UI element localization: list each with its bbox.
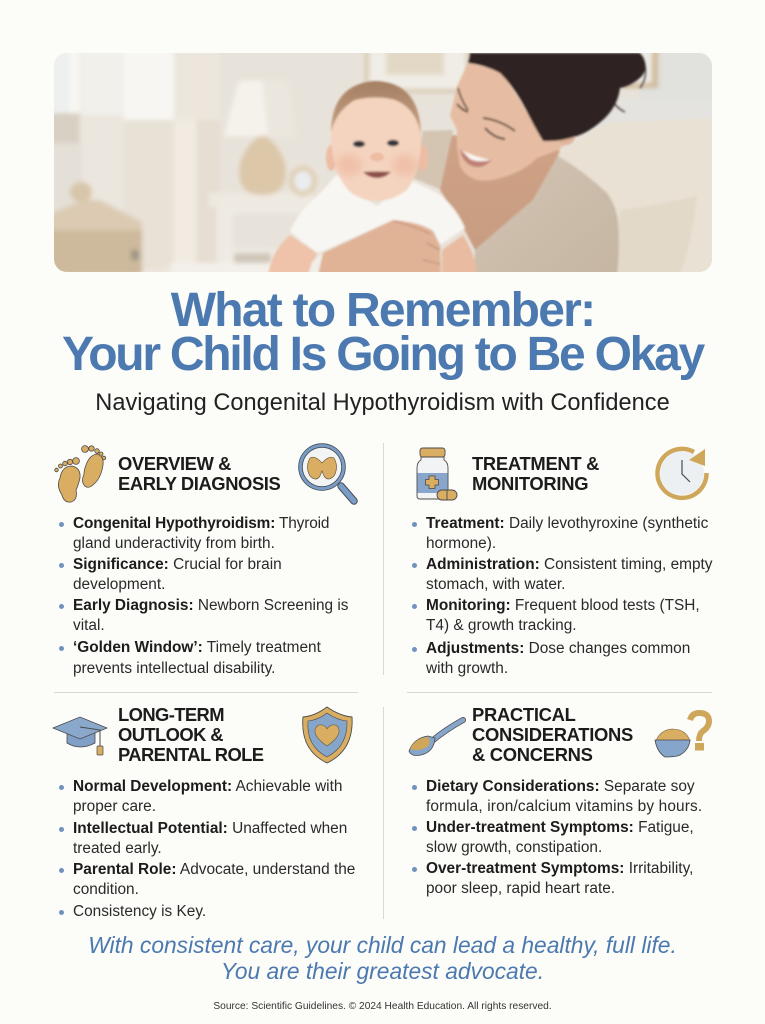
bullet xyxy=(412,515,708,552)
icon: clock with refresh arrow xyxy=(655,446,709,500)
panel: treatment and monitoring xyxy=(412,446,713,677)
mother's features xyxy=(458,88,468,110)
title: Your Child Is Going to Be Okay xyxy=(62,328,703,381)
closing message: With consistent care, your child can lead a healthy, full life. xyxy=(88,932,677,958)
bullet xyxy=(59,556,282,593)
heading: CONSIDERATIONS xyxy=(472,724,633,745)
heading: LONG-TERM xyxy=(118,704,224,725)
bullet xyxy=(412,819,694,856)
bullet: vital. xyxy=(73,617,105,634)
basket xyxy=(50,200,142,232)
mother's hand xyxy=(313,220,441,275)
heading: PRACTICAL xyxy=(472,704,576,725)
bullet: formula, iron/calcium vitamins by hours. xyxy=(426,798,702,815)
bullet: Under-treatment Symptoms: Fatigue, xyxy=(426,819,694,836)
sweater xyxy=(474,156,619,275)
hero photo: mother holding smiling baby xyxy=(54,53,712,272)
bullet: Congenital Hypothyroidism: Thyroid xyxy=(73,515,329,532)
nightstand xyxy=(216,208,300,260)
baby arms xyxy=(268,235,317,275)
heading: EARLY DIAGNOSIS xyxy=(118,473,280,494)
panel: overview and early diagnosis xyxy=(54,443,358,676)
heading xyxy=(118,453,280,494)
heading: OUTLOOK & xyxy=(118,724,223,745)
baby head xyxy=(326,145,336,171)
icon: magnifier over thyroid xyxy=(298,443,358,505)
ear xyxy=(560,137,576,146)
icon: graduation cap xyxy=(52,716,108,756)
bullet xyxy=(412,640,690,677)
title xyxy=(62,284,705,381)
bullet: proper care. xyxy=(73,798,156,815)
bullet xyxy=(412,778,702,815)
clock xyxy=(289,166,317,196)
bullet: Treatment: Daily levothyroxine (synthetic xyxy=(426,515,708,532)
closing message xyxy=(88,932,677,984)
subtitle: Navigating Congenital Hypothyroidism with Confidence xyxy=(95,390,670,416)
bullet xyxy=(412,860,693,897)
bullet: Adjustments: Dose changes common xyxy=(426,640,690,657)
icon: shield with heart xyxy=(302,706,353,764)
icon: spoon of formula xyxy=(408,717,466,756)
bullet: condition. xyxy=(73,881,139,898)
wall xyxy=(220,45,490,245)
panel: long-term outlook and parental role xyxy=(52,704,355,920)
pillow xyxy=(618,198,696,272)
chest skin xyxy=(440,135,560,250)
bullet: Over-treatment Symptoms: Irritability, xyxy=(426,860,693,877)
bullet xyxy=(59,639,321,676)
icon: medicine bottle and pill xyxy=(416,448,458,500)
icon: bowl with question mark xyxy=(654,710,712,758)
bullet: Monitoring: Frequent blood tests (TSH, xyxy=(426,597,700,614)
hair xyxy=(468,53,646,141)
bullet: Consistency is Key. xyxy=(73,903,206,920)
bullet xyxy=(59,597,348,634)
bullet: stomach, with water. xyxy=(426,576,565,593)
bullet: Administration: Consistent timing, empty xyxy=(426,556,713,573)
bullet: gland underactivity from birth. xyxy=(73,535,275,552)
onesie xyxy=(290,174,465,253)
heading: PARENTAL ROLE xyxy=(118,744,263,765)
bullet: Dietary Considerations: Separate soy xyxy=(426,778,695,795)
bullet: Significance: Crucial for brain xyxy=(73,556,282,573)
baby hair xyxy=(331,81,421,135)
bullet: slow growth, constipation. xyxy=(426,839,602,856)
bullet: Early Diagnosis: Newborn Screening is xyxy=(73,597,348,614)
bullet: Parental Role: Advocate, understand the xyxy=(73,861,355,878)
bullet: with growth. xyxy=(426,660,508,677)
bullet xyxy=(59,778,342,815)
bullet xyxy=(59,515,329,552)
heading: TREATMENT & xyxy=(472,453,599,474)
bullet xyxy=(412,556,713,593)
sofa xyxy=(562,119,712,272)
bullet: Normal Development: Achievable with xyxy=(73,778,342,795)
bullet: Intellectual Potential: Unaffected when xyxy=(73,820,347,837)
bullet: ‘Golden Window’: Timely treatment xyxy=(73,639,321,656)
sofa edge xyxy=(170,262,270,272)
sweater behind baby xyxy=(413,130,453,190)
heading xyxy=(472,704,633,765)
heading xyxy=(472,453,599,494)
title: What to Remember: xyxy=(171,284,594,337)
face xyxy=(450,63,577,180)
bullet xyxy=(59,820,347,857)
heading: & CONCERNS xyxy=(472,744,593,765)
heading: OVERVIEW & xyxy=(118,453,231,474)
icon: baby footprints xyxy=(54,445,106,502)
curtains xyxy=(45,45,225,280)
bullet: treated early. xyxy=(73,840,162,857)
lamp xyxy=(225,80,268,137)
panel: practical considerations and concerns xyxy=(408,704,712,897)
bullet: T4) & growth tracking. xyxy=(426,617,577,634)
bullet: development. xyxy=(73,576,165,593)
heading xyxy=(118,704,264,765)
frames xyxy=(363,53,470,95)
bullet: poor sleep, rapid heart rate. xyxy=(426,880,615,897)
closing message: You are their greatest advocate. xyxy=(221,958,544,984)
bullet: hormone). xyxy=(426,535,496,552)
bullet: prevents intellectual disability. xyxy=(73,660,275,676)
bullet xyxy=(59,861,355,898)
bullet xyxy=(412,597,700,634)
source line: Source: Scientific Guidelines. © 2024 Health Education. All rights reserved. xyxy=(213,1001,552,1012)
heading: MONITORING xyxy=(472,473,588,494)
